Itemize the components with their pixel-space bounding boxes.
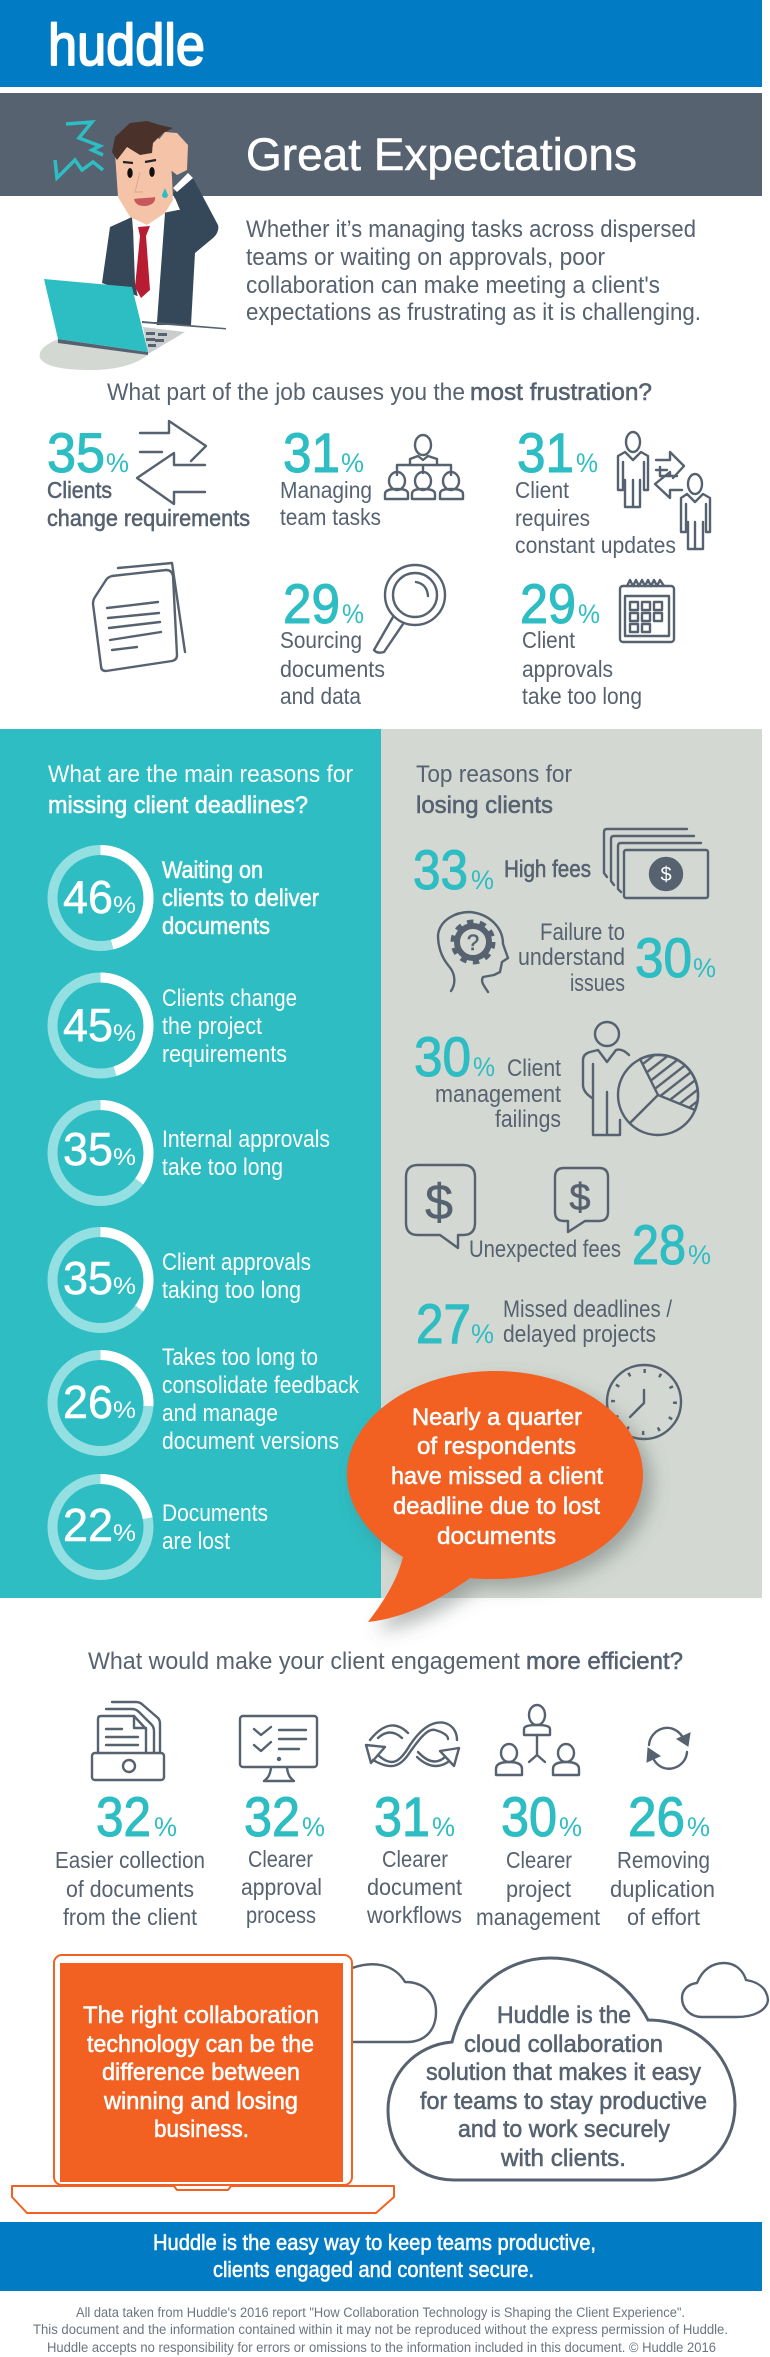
icon: documents [93, 563, 185, 671]
icon: people tree [496, 1705, 579, 1775]
donut: 22%: are lost [162, 1528, 230, 1555]
stat: 33% high fees: 33 [413, 838, 468, 901]
column: clearer approval process: process [246, 1902, 316, 1928]
donut: 26%: consolidate feedback [162, 1372, 360, 1399]
stat: 33% high fees: High fees [504, 856, 591, 883]
heading: most frustration: What part of the job causes you the [107, 379, 465, 406]
panel: missing client deadlines [0, 729, 381, 1598]
cloud text [420, 2002, 707, 2172]
column: clearer document workflows: Clearer [382, 1846, 448, 1872]
stat: 30% client management failings: failings [495, 1106, 561, 1133]
heading: most frustration: most frustration? [470, 379, 652, 406]
stat: 31% managing team tasks: 31 [283, 421, 340, 484]
footer disclaimer: All data taken from Huddle's 2016 report "How Collaboration Technology is Shaping the Client Experience". [76, 2305, 685, 2320]
column: removing duplication of effort: of effort [627, 1904, 701, 1930]
stat: 35% clients change requirements: change requirements [47, 505, 250, 531]
column: removing duplication of effort: 26 [628, 1785, 685, 1848]
donut: 46%: clients to deliver [162, 885, 319, 912]
donut: 22%: Documents [162, 1500, 268, 1527]
stat: 29% client approvals take too long: approvals [522, 656, 613, 682]
stat: 33% high fees: $ [660, 864, 672, 886]
bottom banner: Huddle is the easy way to keep teams productive, [153, 2230, 596, 2255]
icon: swap arrows [137, 421, 206, 504]
heading: more efficient: What would make your client engagement [88, 1648, 520, 1675]
stat: 31% client requires constant updates: requires [515, 505, 590, 531]
donut: 35% client approvals: 35 [63, 1252, 113, 1304]
laptop text: business. [154, 2116, 249, 2143]
icon: monitor checklist [240, 1716, 317, 1781]
laptop text: The right collaboration [83, 2002, 319, 2029]
stat: 28% unexpected fees: Unexpected fees [469, 1236, 621, 1263]
donut: 35% internal approvals: 35 [63, 1123, 113, 1175]
stat: 30% failure to understand issues [438, 912, 716, 997]
column: easier collection of documents: from the client [63, 1904, 198, 1930]
column: removing duplication of effort [610, 1728, 715, 1930]
stat: 30% client management failings: 30 [414, 1025, 471, 1088]
stat: 35% clients change requirements [47, 421, 250, 531]
donut: 22%: % [113, 1520, 136, 1547]
column: easier collection of documents: % [154, 1812, 177, 1842]
callout: lost documents bubble: of respondents [417, 1433, 576, 1460]
stat: 27% missed deadlines: 27 [416, 1292, 471, 1355]
icon: workflow arrows [366, 1722, 459, 1766]
column: clearer document workflows [366, 1722, 463, 1928]
stat: 30% client management failings: % [473, 1052, 495, 1082]
laptop with message [12, 1955, 394, 2213]
column: clearer approval process: Clearer [248, 1846, 313, 1872]
stat: 27% missed deadlines: Missed deadlines / [503, 1296, 672, 1323]
heading: losing clients: Top reasons for [416, 761, 572, 788]
column: clearer approval process: approval [241, 1874, 322, 1900]
stat: 31% managing team tasks: team tasks [280, 504, 381, 530]
icon: head with gear [438, 912, 508, 992]
cloud text: Huddle is the [497, 2002, 631, 2029]
stat: 28% unexpected fees: 28 [632, 1213, 686, 1276]
icon: person with pie chart [583, 1022, 698, 1135]
panel: losing clients [381, 729, 762, 1598]
icon: clock [607, 1365, 681, 1439]
donut: 35% client approvals [52, 1232, 311, 1328]
donut: 26%: Takes too long to [162, 1344, 318, 1371]
stat: 27% missed deadlines: delayed projects [503, 1321, 656, 1348]
column: easier collection of documents: 32 [96, 1785, 151, 1848]
callout: lost documents bubble: Nearly a quarter [412, 1404, 582, 1431]
stat: 28% unexpected fees [406, 1165, 711, 1276]
laptop text: difference between [102, 2059, 300, 2086]
donut: 35% internal approvals: Internal approvals [162, 1126, 330, 1153]
heading: missing client deadlines: What are the main reasons for [48, 761, 353, 788]
stat: 29% sourcing documents and data [280, 565, 445, 709]
stat: 31% managing team tasks [280, 421, 463, 530]
title band [0, 93, 762, 196]
callout: lost documents bubble: deadline due to lost [393, 1493, 600, 1520]
heading: losing clients: losing clients [416, 792, 553, 819]
stat: 31% client requires constant updates: 31 [517, 421, 574, 484]
donut: 26%: document versions [162, 1428, 339, 1455]
column: clearer project management: 30 [501, 1785, 557, 1848]
column: clearer project management: Clearer [506, 1847, 572, 1873]
stat: 29% sourcing documents and data: documents [280, 656, 385, 682]
column: easier collection of documents: of documents [66, 1876, 194, 1902]
column: removing duplication of effort: Removing [617, 1847, 710, 1873]
stat: 27% missed deadlines: % [471, 1319, 494, 1349]
stat: 29% sourcing documents and data: and data [280, 683, 361, 709]
cloud with Huddle message [388, 1958, 735, 2180]
title: Great Expectations [246, 129, 637, 180]
stat: 30% client management failings: Client [507, 1055, 561, 1082]
decorative cloud behind laptop [352, 1964, 436, 2042]
intro text [246, 216, 701, 326]
laptop text: technology can be the [87, 2031, 314, 2058]
donut: 45%: Clients change [162, 985, 297, 1012]
donut: 35% client approvals: % [113, 1273, 136, 1300]
stat: 30% failure to understand issues: 30 [635, 926, 692, 989]
column: removing duplication of effort: duplication [610, 1876, 715, 1902]
icon: two people exchanging [618, 432, 710, 549]
stat: 31% client requires constant updates [515, 421, 710, 558]
column: easier collection of documents: Easier collection [55, 1847, 205, 1873]
donut: 35% client approvals: taking too long [162, 1277, 301, 1304]
intro text: expectations as frustrating as it is challenging. [246, 299, 701, 326]
column: clearer approval process: 32 [244, 1785, 300, 1848]
stat: 29% sourcing documents and data: Sourcing [280, 627, 362, 653]
donut: 22%: 22 [63, 1499, 113, 1551]
column: clearer document workflows: % [432, 1812, 455, 1842]
donut: 22% [52, 1479, 268, 1575]
stat: 29% client approvals take too long: 29 [520, 572, 576, 635]
heading: losing clients [416, 761, 572, 819]
icon: speech bubble with dollar large [406, 1165, 475, 1248]
donut: 35% client approvals: Client approvals [162, 1249, 311, 1276]
icon: magnifier [374, 565, 445, 653]
callout: lost documents bubble: have missed a client [391, 1463, 603, 1490]
stat: 30% failure to understand issues: issues [570, 970, 625, 997]
donut: 45%: 45 [63, 999, 113, 1051]
icon: head with gear: ? [467, 930, 479, 955]
stat: 35% clients change requirements: Clients [47, 477, 112, 503]
stat: 29% sourcing documents and data: % [342, 599, 364, 629]
intro text: Whether it’s managing tasks across dispersed [246, 216, 696, 243]
column: easier collection of documents [55, 1702, 205, 1930]
column: clearer project management: % [559, 1812, 582, 1842]
heading: missing client deadlines: missing client deadlines? [48, 792, 308, 819]
donut: 45% [52, 978, 297, 1074]
icon: speech bubble with dollar small: $ [569, 1177, 591, 1219]
callout: lost documents bubble: documents [437, 1523, 556, 1550]
icon: banknotes [604, 829, 708, 898]
donut: 35% internal approvals: % [113, 1144, 136, 1171]
column: clearer document workflows: workflows [366, 1902, 462, 1928]
intro text: collaboration can make meeting a client's [246, 272, 660, 299]
donut: 26% [52, 1344, 360, 1455]
donut: 45%: % [113, 1020, 136, 1047]
stat: 29% client approvals take too long [520, 572, 674, 709]
footer disclaimer: Huddle accepts no responsibility for errors or omissions to the information included in this document. © Huddle 2016 [47, 2340, 716, 2355]
donut: 26%: and manage [162, 1400, 278, 1427]
icon: document box [92, 1702, 164, 1780]
bottom banner [0, 2222, 762, 2291]
column: clearer project management [476, 1705, 601, 1930]
stat: 27% missed deadlines [416, 1292, 672, 1355]
column: clearer approval process [240, 1716, 325, 1928]
cloud text: cloud collaboration [464, 2031, 663, 2058]
stat: 31% client requires constant updates: constant updates [515, 532, 676, 558]
footer disclaimer: This document and the information contained within it may not be reproduced without the express permission of Huddle. [33, 2322, 728, 2337]
stat: 31% managing team tasks: Managing [280, 477, 372, 503]
icon: speech bubble with dollar large: $ [425, 1174, 453, 1230]
stat: 30% client management failings [414, 1022, 698, 1135]
stat: 31% client requires constant updates: % [576, 448, 598, 478]
stat: 30% failure to understand issues: understand [518, 944, 625, 971]
icon: calendar [620, 580, 674, 642]
stat: 33% high fees: % [471, 865, 494, 895]
cloud text: and to work securely [458, 2116, 670, 2143]
intro text: teams or waiting on approvals, poor [246, 244, 605, 271]
stat: 31% managing team tasks: % [341, 448, 364, 478]
stat: 29% sourcing documents and data: 29 [283, 572, 340, 635]
donut: 26%: % [113, 1397, 136, 1424]
laptop text [83, 2002, 319, 2143]
donut: 46%: Waiting on [162, 857, 263, 884]
heading: most frustration [107, 379, 652, 406]
stat: 35% clients change requirements: 35 [47, 421, 105, 484]
logo: huddle: huddle [48, 13, 205, 78]
column: clearer project management: management [476, 1904, 601, 1930]
cloud text: for teams to stay productive [420, 2088, 707, 2115]
donut: 46%: documents [162, 913, 270, 940]
donut: 26%: 26 [63, 1376, 113, 1428]
column: clearer document workflows: 31 [374, 1785, 430, 1848]
stat: 30% client management failings: management [435, 1081, 561, 1108]
stat: 30% failure to understand issues: % [693, 953, 716, 983]
illustration: frustrated man at laptop [40, 121, 226, 370]
callout: lost documents bubble [347, 1371, 643, 1622]
heading: more efficient: more efficient? [526, 1648, 683, 1675]
stat: 33% high fees [413, 829, 708, 901]
stat: 31% client requires constant updates: Client [515, 477, 570, 503]
cloud text: solution that makes it easy [426, 2059, 701, 2086]
donut: 45%: requirements [162, 1041, 287, 1068]
stat: 35% clients change requirements: % [106, 448, 129, 478]
donut: 46%: % [113, 892, 136, 919]
column: clearer project management: project [506, 1876, 572, 1902]
footer disclaimer [33, 2305, 728, 2355]
bottom banner: clients engaged and content secure. [213, 2257, 534, 2282]
donut: 35% internal approvals [52, 1105, 330, 1201]
heading: missing client deadlines [48, 761, 353, 819]
stat: 30% failure to understand issues: Failure to [540, 919, 625, 946]
laptop text: winning and losing [103, 2088, 298, 2115]
icon: cycle arrows [647, 1728, 690, 1769]
cloud text: with clients. [500, 2145, 626, 2172]
donut: 35% internal approvals: take too long [162, 1154, 283, 1181]
icon: speech bubble with dollar small [555, 1168, 608, 1232]
donut: 45%: the project [162, 1013, 262, 1040]
column: clearer approval process: % [302, 1812, 325, 1842]
column: removing duplication of effort: % [687, 1812, 710, 1842]
stat: 28% unexpected fees: % [688, 1240, 711, 1270]
stat: 29% client approvals take too long: % [578, 599, 600, 629]
header bar with logo [0, 0, 762, 87]
donut: 46%: 46 [63, 871, 113, 923]
donut: 46% [52, 850, 319, 946]
stat: 29% client approvals take too long: take too long [522, 683, 642, 709]
stat: 29% client approvals take too long: Client [522, 627, 576, 653]
column: clearer document workflows: document [367, 1874, 463, 1900]
icon: team hierarchy [385, 435, 463, 499]
decorative small cloud [682, 1963, 768, 2017]
